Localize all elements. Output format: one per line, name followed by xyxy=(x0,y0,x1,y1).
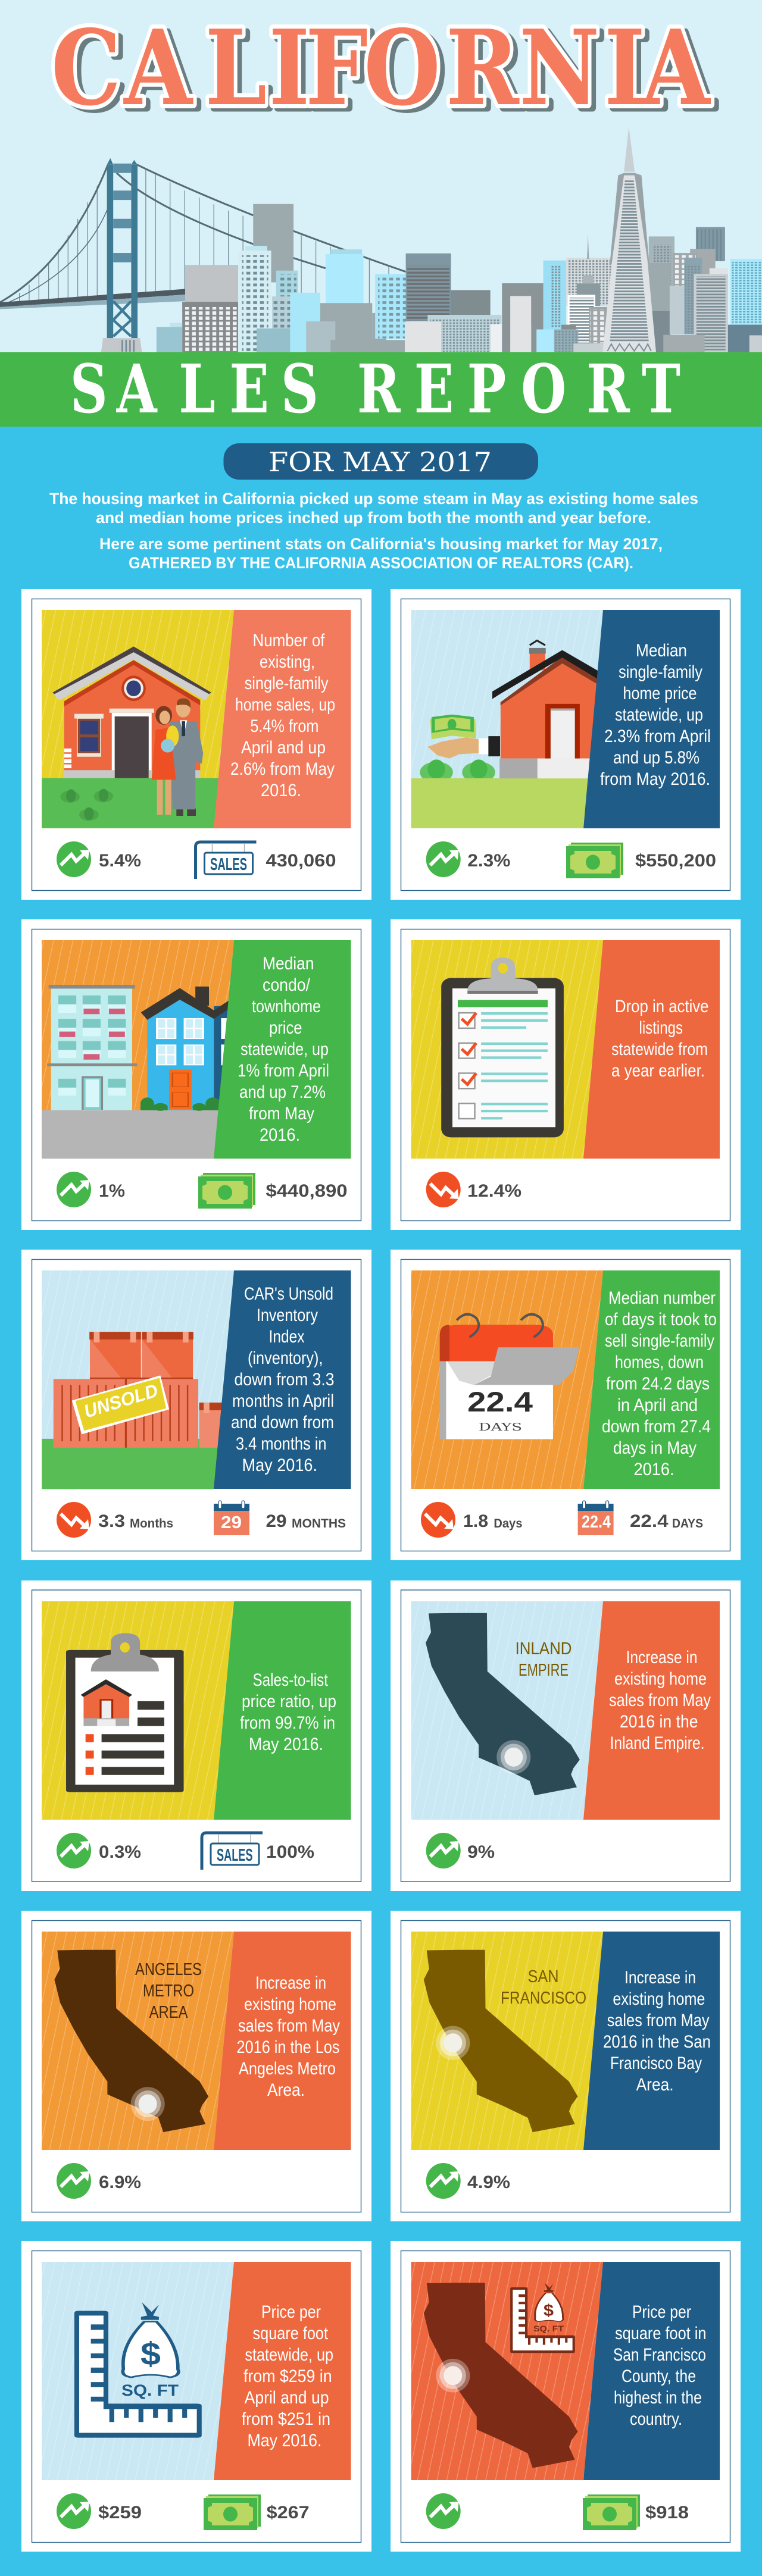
description xyxy=(240,1670,336,1754)
stat: money and price xyxy=(566,843,716,878)
description: County, the xyxy=(622,2367,696,2386)
description: Area. xyxy=(636,2075,674,2095)
description: sales from May xyxy=(238,2016,340,2036)
description: May 2016. xyxy=(242,1456,317,1475)
map label: EMPIRE xyxy=(519,1661,569,1680)
stat: money and price: $267 xyxy=(267,2503,310,2522)
description: existing home xyxy=(613,1989,705,2009)
stat: up arrow and percentage xyxy=(426,841,510,877)
panel: price per square foot statewide xyxy=(21,2241,371,2552)
description xyxy=(611,997,708,1081)
map: California with ruler and money bag: SQ. FT xyxy=(533,2324,564,2333)
stat: down arrow and months: 3.3 xyxy=(98,1511,125,1531)
description: Increase in xyxy=(624,1968,696,1987)
stat: up arrow and percentage: 2.3% xyxy=(467,851,510,871)
stat: sales sign and ratio: SALES xyxy=(217,1846,252,1865)
description: Angeles Metro xyxy=(239,2059,336,2079)
stat: down arrow and days: Days xyxy=(494,1517,522,1530)
illustration: ruler and money bag: $ xyxy=(140,2336,161,2372)
stat: up arrow and percentage xyxy=(57,841,141,877)
title: CALIFORNIA: CALIFORNIA xyxy=(51,7,711,129)
stat: up arrow and price: $259 xyxy=(98,2503,142,2522)
description: statewide, up xyxy=(245,2345,333,2365)
stat: down arrow and months: Months xyxy=(130,1517,173,1530)
stat: down arrow and percentage xyxy=(426,1172,521,1207)
stat: money and price xyxy=(583,2494,689,2530)
description: Francisco Bay xyxy=(610,2054,702,2073)
description: 2016. xyxy=(261,781,301,800)
description: existing home xyxy=(614,1669,707,1689)
description: 5.4% from xyxy=(250,716,318,736)
illustration: house and family xyxy=(42,646,218,828)
description: from 24.2 days xyxy=(606,1374,710,1394)
pill: for May 2017: FOR MAY 2017 xyxy=(268,446,492,478)
stat: sales sign and ratio: 100% xyxy=(266,1842,314,1862)
stat: up arrow and price xyxy=(57,2493,142,2529)
icon: up arrow xyxy=(426,2493,461,2529)
description: from $259 in xyxy=(243,2367,332,2386)
description: Index xyxy=(269,1327,305,1347)
illustration: tear-off calendar: DAYS xyxy=(479,1421,522,1433)
description: single-family xyxy=(619,662,702,682)
description: listings xyxy=(639,1018,683,1038)
illustration: clipboard with house listing xyxy=(66,1633,184,1792)
description: existing, xyxy=(260,652,315,672)
description xyxy=(609,1648,711,1753)
description: Inventory xyxy=(257,1306,318,1325)
stat: up arrow and percentage xyxy=(57,1172,125,1207)
map label: ANGELES xyxy=(135,1960,202,1979)
description: May 2016. xyxy=(249,1735,323,1754)
description: homes, down xyxy=(615,1353,704,1372)
stat: up arrow and percentage: 9% xyxy=(467,1842,495,1862)
map: California with ruler and money bag xyxy=(424,2283,578,2468)
description: home price xyxy=(623,684,697,703)
description: months in April xyxy=(232,1391,334,1411)
stat: calendar and days xyxy=(578,1501,703,1535)
illustration: Golden Gate bridge and city skyline xyxy=(0,127,762,352)
stat: calendar and months xyxy=(214,1501,346,1535)
illustration: clipboard checklist xyxy=(441,957,564,1137)
description: Inland Empire. xyxy=(610,1733,705,1753)
description: of days it took to xyxy=(605,1310,717,1329)
map label xyxy=(516,1639,572,1680)
description: sell single-family xyxy=(605,1331,714,1351)
map label: SAN xyxy=(527,1967,558,1986)
stat: up arrow and percentage: 5.4% xyxy=(99,851,141,871)
description: statewide, up xyxy=(241,1040,329,1059)
sign text: unsold: UNSOLD xyxy=(82,1380,160,1422)
pill: for May 2017 xyxy=(224,443,538,480)
panel: active listings xyxy=(391,919,741,1230)
description: sales from May xyxy=(609,1691,711,1710)
illustration: ruler and money bag: SQ. FT xyxy=(121,2381,179,2399)
panel: San Francisco xyxy=(391,1911,741,2221)
description: and up 7.2% xyxy=(239,1082,326,1102)
description xyxy=(230,631,335,800)
intro text: The housing market in California picked up some steam in May as existing home sales xyxy=(49,490,698,508)
stat: up arrow and percentage xyxy=(426,2163,510,2199)
description: from 99.7% in xyxy=(240,1713,335,1733)
description: and up 5.8% xyxy=(613,748,699,768)
description xyxy=(231,1284,335,1475)
description: highest in the xyxy=(614,2388,702,2408)
description xyxy=(600,641,711,789)
map label: METRO xyxy=(143,1982,194,2001)
description: 1% from April xyxy=(238,1061,329,1081)
description: Median xyxy=(263,954,314,974)
description: Price per xyxy=(261,2302,321,2322)
map: California, Los Angeles highlighted xyxy=(54,1950,208,2132)
map label: AREA xyxy=(149,2003,188,2022)
panel: median home price xyxy=(391,589,741,900)
description: Drop in active xyxy=(615,997,708,1016)
description xyxy=(237,1973,340,2100)
stat: money and price xyxy=(198,1173,348,1209)
intro text: GATHERED BY THE CALIFORNIA ASSOCIATION OF REALTORS (CAR). xyxy=(129,554,633,572)
description: 3.4 months in xyxy=(236,1434,326,1454)
description xyxy=(613,2302,706,2429)
description: (inventory), xyxy=(248,1348,323,1368)
description: May 2016. xyxy=(248,2431,321,2450)
description: San Francisco xyxy=(613,2345,706,2365)
description: April and up xyxy=(245,2388,329,2408)
stat: calendar and days: DAYS xyxy=(672,1517,703,1530)
description: Increase in xyxy=(255,1973,326,1993)
stat: sales sign and total: SALES xyxy=(210,855,247,874)
intro text: Here are some pertinent stats on California's housing market for May 2017, xyxy=(99,535,663,553)
description: Sales-to-list xyxy=(252,1670,329,1690)
description: price xyxy=(269,1018,302,1038)
panel: San Francisco County price per square foot xyxy=(391,2241,741,2552)
title: CALIFORNIA: CALIFORNIA xyxy=(51,7,711,129)
description: 2016 in the San xyxy=(603,2032,711,2052)
map: California, San Francisco highlighted xyxy=(424,1950,578,2132)
panel: unsold inventory index xyxy=(21,1250,371,1560)
panel: Los Angeles Metro Area xyxy=(21,1911,371,2221)
description xyxy=(242,2302,333,2450)
description: CAR's Unsold xyxy=(244,1284,333,1304)
description: 2016 in the Los xyxy=(237,2037,339,2057)
panel: condo price xyxy=(21,919,371,1230)
description: 2.6% from May xyxy=(230,759,335,779)
description: from $251 in xyxy=(242,2409,330,2429)
stat: sales sign and ratio xyxy=(202,1833,314,1870)
description: 2016. xyxy=(260,1125,300,1145)
band: SALES REPORT: SALES REPORT xyxy=(70,350,680,428)
panel: existing home sales xyxy=(21,589,371,900)
header: skyline hero xyxy=(0,0,762,352)
stat: money and price: $918 xyxy=(645,2503,689,2522)
description: days in May xyxy=(613,1438,697,1458)
description: home sales, up xyxy=(235,695,335,715)
stat: calendar and days: 22.4 xyxy=(582,1513,611,1532)
description xyxy=(238,954,329,1145)
description: April and up xyxy=(241,738,326,758)
map label xyxy=(135,1960,202,2022)
stat: up arrow and percentage: 6.9% xyxy=(99,2173,141,2192)
description: square foot xyxy=(252,2324,329,2343)
stat: down arrow and days xyxy=(421,1502,522,1538)
description: condo/ xyxy=(263,975,311,995)
stat: calendar and months: 29 xyxy=(266,1511,287,1531)
description: in April and xyxy=(617,1395,698,1415)
description: from May 2016. xyxy=(600,769,710,789)
description: square foot in xyxy=(615,2324,706,2343)
map: California with ruler and money bag: $ xyxy=(544,2301,554,2320)
description: Increase in xyxy=(626,1648,698,1667)
title: CALIFORNIA: CALIFORNIA xyxy=(56,11,716,133)
stat: calendar and days: 22.4 xyxy=(630,1511,669,1531)
description: single-family xyxy=(245,674,329,693)
stat: down arrow and months xyxy=(57,1502,173,1538)
description: Number of xyxy=(252,631,325,650)
stat: up arrow and percentage: 1% xyxy=(99,1181,125,1201)
description: down from 3.3 xyxy=(235,1370,335,1389)
illustration: house and money in hand xyxy=(411,640,602,828)
stat: up arrow and percentage: 4.9% xyxy=(467,2173,510,2192)
description: a year earlier. xyxy=(611,1061,705,1081)
description: 2016 in the xyxy=(620,1712,698,1732)
description: from May xyxy=(249,1104,314,1123)
stat: money and price xyxy=(204,2494,310,2530)
description: 2016. xyxy=(633,1460,674,1479)
map label: FRANCISCO xyxy=(501,1989,586,2008)
description: Area. xyxy=(267,2080,305,2100)
intro text xyxy=(49,490,698,572)
stat: calendar and months: MONTHS xyxy=(292,1517,346,1530)
description: 2.3% from April xyxy=(604,727,711,746)
description: townhome xyxy=(252,997,321,1016)
map label xyxy=(501,1967,586,2008)
illustration: tear-off calendar: 22.4 xyxy=(467,1386,533,1417)
stat: up arrow and percentage xyxy=(57,1833,141,1868)
description: down from 27.4 xyxy=(602,1417,711,1436)
illustration: condos and townhomes xyxy=(42,985,233,1159)
description: and down from xyxy=(231,1413,334,1432)
map: California, Inland Empire highlighted xyxy=(426,1613,580,1795)
description: Price per xyxy=(632,2302,691,2322)
description: price ratio, up xyxy=(242,1692,336,1711)
description xyxy=(603,1968,711,2095)
description: sales from May xyxy=(607,2011,710,2030)
description: Median number xyxy=(608,1288,716,1308)
stat: up arrow and percentage: 0.3% xyxy=(99,1842,141,1862)
stat: down arrow and days: 1.8 xyxy=(463,1511,488,1531)
panel: sales-to-list ratio xyxy=(21,1580,371,1891)
stat: sales sign and total: 430,060 xyxy=(266,851,336,871)
stat: down arrow and percentage: 12.4% xyxy=(467,1181,521,1201)
illustration: unsold containers xyxy=(42,1332,223,1489)
stat: up arrow and percentage xyxy=(426,1833,495,1868)
description xyxy=(602,1288,717,1479)
intro text: and median home prices inched up from both the month and year before. xyxy=(96,509,651,527)
stat: up arrow and percentage xyxy=(57,2163,141,2199)
illustration: tear-off calendar xyxy=(440,1314,579,1439)
panel: Inland Empire xyxy=(391,1580,741,1891)
illustration: ruler and money bag xyxy=(74,2302,202,2438)
stat: calendar and months: 29 xyxy=(221,1513,242,1532)
stat: sales sign and total xyxy=(195,842,336,879)
description: existing home xyxy=(244,1995,336,2014)
description: Median xyxy=(636,641,687,661)
stat: money and price: $440,890 xyxy=(266,1181,348,1201)
stat: money and price: $550,200 xyxy=(635,851,716,871)
description: statewide from xyxy=(611,1040,708,1059)
description: statewide, up xyxy=(615,705,703,725)
description: country. xyxy=(630,2409,682,2429)
panel: median days to sell xyxy=(391,1250,741,1560)
map label: INLAND xyxy=(516,1639,572,1658)
